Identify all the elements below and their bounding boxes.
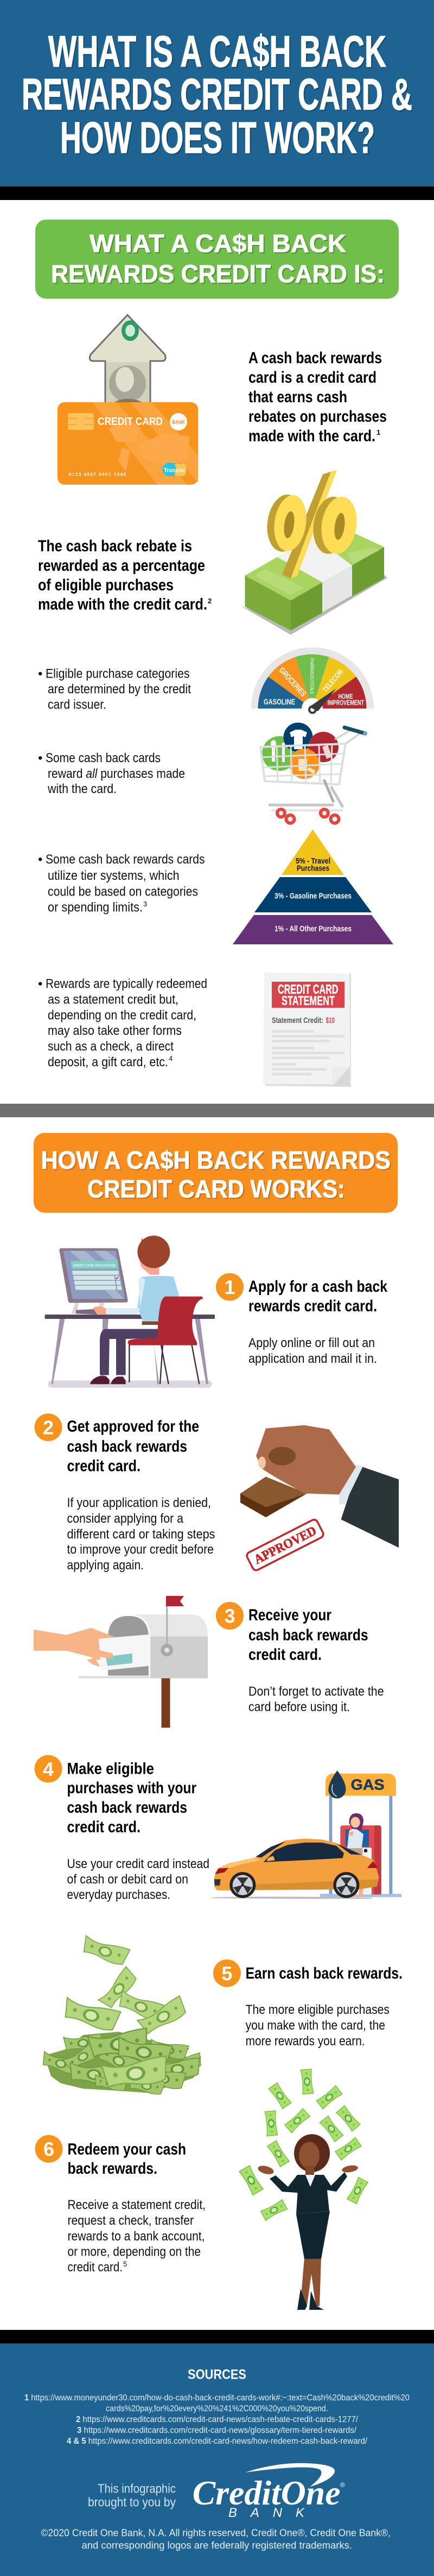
footer panel xyxy=(0,2330,434,2576)
step 6: Receive a statement credit, xyxy=(67,2198,206,2212)
step 1: application and mail it in. xyxy=(248,1351,377,1366)
step 5: Earn cash back rewards. xyxy=(246,1965,403,1982)
text: bullet tier systems: could be based on categories xyxy=(48,885,198,899)
text: definition: 1 xyxy=(376,428,380,436)
logo: Credit One Bank: BANK xyxy=(228,2506,305,2520)
text: definition: made with the card. xyxy=(248,427,375,445)
step 6: Redeem your cash xyxy=(67,2140,186,2159)
step 4: 4 xyxy=(43,1758,54,1780)
illustration: pile of falling money xyxy=(41,1936,203,2096)
illustration: mailbox and hand xyxy=(34,1596,208,1728)
step 4: credit card. xyxy=(67,1818,141,1836)
step 3: credit card. xyxy=(248,1646,322,1664)
chart: rewards tier pyramid: Purchases xyxy=(297,864,329,873)
sources list: 3 https://www.creditcards.com/credit-card-news/glossary/term-tiered-rewards/ xyxy=(77,2426,357,2435)
text: bullet redemption: • xyxy=(38,977,42,991)
text: bullet redemption: may also take other forms xyxy=(48,1023,182,1038)
text: bullet tier systems: or spending limits. xyxy=(48,900,143,915)
step 4: Use your credit card instead xyxy=(67,1857,209,1871)
text: bullet eligible categories: card issuer. xyxy=(48,698,106,712)
step 6: back rewards. xyxy=(67,2160,157,2178)
icon: orange credit card: BANK xyxy=(172,419,185,426)
header panel xyxy=(0,0,434,200)
text: bullet tier systems: utilize tier systems, which xyxy=(48,868,180,883)
sources list: 2 https://www.creditcards.com/credit-card-news/cash-rebate-credit-cards-1277/ xyxy=(76,2415,359,2424)
text: bullet all purchases: • xyxy=(38,751,42,765)
text: rebate percentage: 2 xyxy=(208,597,212,605)
step 3: cash back rewards xyxy=(248,1626,368,1644)
text: bullet all purchases: with the card. xyxy=(47,782,117,796)
text: definition: that earns cash xyxy=(248,388,347,406)
brought to you by xyxy=(88,2482,176,2509)
text: rebate percentage: The cash back rebate is xyxy=(38,537,192,555)
copyright: ©2020 Credit One Bank, N.A. All rights reserved, Credit One®, Credit One Bank®, xyxy=(41,2527,391,2539)
icon: money stack with percent sign xyxy=(241,470,387,635)
logo: Credit One Bank: ® xyxy=(340,2481,345,2489)
step 2: to improve your credit before xyxy=(67,1542,214,1557)
step 6: or more, depending on the xyxy=(67,2245,201,2259)
text: bullet eligible categories: • xyxy=(38,667,42,681)
chart: category gauge: HOME xyxy=(339,692,353,700)
text: definition xyxy=(248,349,387,445)
copyright xyxy=(41,2527,391,2551)
step 6 xyxy=(35,2135,206,2275)
chart: rewards tier pyramid: 3% - Gasoline Purchases xyxy=(275,892,352,901)
chart: category gauge: GASOLINE xyxy=(264,697,295,707)
step 6: credit card. xyxy=(67,2260,123,2275)
step 6: 6 xyxy=(43,2138,54,2160)
step 2: different card or taking steps xyxy=(67,1527,215,1542)
text: bullet all purchases: Some cash back cards xyxy=(46,751,161,765)
step 4: everyday purchases. xyxy=(67,1888,170,1902)
panel: what it is heading: REWARDS CREDIT CARD IS: xyxy=(51,260,385,288)
brought to you by: brought to you by xyxy=(88,2495,176,2509)
brought to you by: This infographic xyxy=(98,2482,176,2496)
icon: credit card statement: STATEMENT xyxy=(282,994,335,1008)
step 1: rewards credit card. xyxy=(248,1297,377,1315)
step 6: request a check, transfer xyxy=(67,2213,194,2228)
text: bullet tier systems xyxy=(38,852,205,915)
text: bullet eligible categories xyxy=(38,667,191,712)
step 2: credit card. xyxy=(67,1457,141,1475)
icon: credit card statement: Statement Credit: xyxy=(272,1016,323,1025)
divider band xyxy=(0,1104,434,1117)
step 4: Make eligible xyxy=(67,1760,154,1778)
step 4: of cash or debit card on xyxy=(67,1872,188,1886)
step 1 xyxy=(216,1273,387,1366)
illustration: person applying at computer xyxy=(45,1235,215,1388)
illustration: woman with money raining xyxy=(239,2069,368,2310)
copyright: and corresponding logos are federally registered trademarks. xyxy=(81,2540,352,2551)
icon: orange credit card: Transfer xyxy=(164,467,186,474)
text: bullet redemption: depending on the credit card, xyxy=(48,1008,196,1023)
text: definition: rebates on purchases xyxy=(248,408,387,426)
step 4 xyxy=(35,1755,209,1902)
step 5: 5 xyxy=(221,1962,232,1985)
step 2: cash back rewards xyxy=(67,1438,187,1456)
title xyxy=(22,27,412,163)
panel: what it is heading: WHAT A CA$H BACK xyxy=(90,229,346,257)
panel: how it works heading xyxy=(34,1133,398,1213)
logo: Credit One Bank: CreditOne xyxy=(193,2474,341,2512)
sources list: cards%20pay,for%20every%20%241%2C000%20you%20spend. xyxy=(106,2404,328,2413)
text: bullet eligible categories: are determined by the credit xyxy=(48,682,191,697)
icon: orange credit card: CREDIT CARD xyxy=(98,416,163,428)
sources list: 4 & 5 https://www.creditcards.com/credit-card-news/how-redeem-cash-back-reward/ xyxy=(67,2437,368,2446)
chart: category gauge xyxy=(251,647,374,713)
text: bullet all purchases: reward all purchases made xyxy=(48,767,185,781)
illustration: person applying at computer: CREDIT CARD APPLICATION xyxy=(73,1264,116,1267)
chart: category gauge: GROCERIES xyxy=(277,666,308,699)
icon: credit card statement: $10 xyxy=(326,1016,335,1025)
text: rebate percentage: made with the credit card. xyxy=(38,595,207,614)
text: definition: card is a credit card xyxy=(248,369,376,387)
sources list xyxy=(24,2393,410,2446)
text: bullet redemption xyxy=(38,977,207,1070)
panel: how it works heading: HOW A CA$H BACK REWARDS xyxy=(41,1146,391,1174)
chart: rewards tier pyramid: 5% - Travel xyxy=(296,856,330,866)
step 1: Apply online or fill out an xyxy=(248,1336,375,1350)
text: bullet redemption: as a statement credit but, xyxy=(48,992,178,1007)
step 2 xyxy=(35,1414,215,1573)
step 6: 5 xyxy=(123,2260,127,2268)
text: bullet tier systems: Some cash back rewards cards xyxy=(46,852,205,867)
text: rebate percentage xyxy=(38,537,212,614)
icon: orange credit card: 0123 4567 8901 2345 xyxy=(69,472,126,477)
step 5: you make with the card, the xyxy=(246,2018,385,2033)
chart: category gauge: PHARMACEUTICALS xyxy=(309,658,315,694)
text: bullet redemption: 4 xyxy=(169,1054,173,1062)
step 3: card before using it. xyxy=(248,1700,350,1715)
step 5: more rewards you earn. xyxy=(246,2034,365,2049)
step 4: cash back rewards xyxy=(67,1799,187,1817)
chart: rewards tier pyramid xyxy=(233,829,393,944)
step 4: purchases with your xyxy=(67,1779,196,1797)
chart: rewards tier pyramid: 1% - All Other Purchases xyxy=(275,924,352,933)
text: bullet all purchases xyxy=(38,751,185,796)
text: rebate percentage: rewarded as a percentage xyxy=(38,557,205,575)
chart: category gauge: IMPROVEMENT xyxy=(328,698,364,707)
text: bullet tier systems: • xyxy=(38,852,42,867)
logo: Credit One Bank xyxy=(193,2463,345,2520)
step 3: Receive your xyxy=(248,1606,331,1624)
illustration: car at gas station xyxy=(212,1770,401,1899)
text: bullet redemption: such as a check, a direct xyxy=(48,1039,174,1054)
step 3: 3 xyxy=(224,1605,235,1627)
step 5: The more eligible purchases xyxy=(246,2002,390,2017)
illustration: car at gas station: GAS xyxy=(351,1776,385,1793)
text: bullet tier systems: 3 xyxy=(143,900,147,908)
icon: dollar bill arrow xyxy=(58,315,198,485)
chart: category gauge: TELECOM xyxy=(321,667,344,694)
text: bullet redemption: Rewards are typically redeemed xyxy=(46,977,207,991)
panel: what it is heading xyxy=(35,220,399,299)
icon: shopping cart xyxy=(260,723,367,823)
text: rebate percentage: of eligible purchases xyxy=(38,576,174,594)
step 1: Apply for a cash back xyxy=(248,1278,387,1296)
step 5 xyxy=(213,1959,403,2049)
step 2: If your application is denied, xyxy=(67,1496,211,1510)
step 2: consider applying for a xyxy=(67,1511,184,1526)
text: bullet eligible categories: Eligible purchase categories xyxy=(46,667,190,681)
text: definition: A cash back rewards xyxy=(248,349,382,367)
step 3 xyxy=(216,1602,384,1715)
illustration: approval stamp and hand xyxy=(240,1425,399,1572)
step 2: Get approved for the xyxy=(67,1418,199,1435)
text: bullet redemption: deposit, a gift card, etc. xyxy=(48,1055,168,1070)
step 6: rewards to a bank account, xyxy=(67,2229,205,2244)
icon: credit card statement: CREDIT CARD xyxy=(278,982,339,997)
sources list: 1 https://www.moneyunder30.com/how-do-cash-back-credit-cards-work#:~:text=Cash%20back%20credit%20 xyxy=(24,2393,410,2403)
icon: orange credit card xyxy=(58,402,198,485)
step 2: applying again. xyxy=(67,1558,144,1573)
sources heading: SOURCES xyxy=(188,2367,246,2382)
icon: credit card statement xyxy=(263,973,351,1087)
step 2: 2 xyxy=(43,1416,54,1439)
step 1: 1 xyxy=(224,1276,235,1298)
panel: how it works heading: CREDIT CARD WORKS: xyxy=(87,1175,345,1203)
step 3: Don’t forget to activate the xyxy=(248,1684,384,1699)
illustration: approval stamp and hand: APPROVED xyxy=(252,1524,319,1567)
